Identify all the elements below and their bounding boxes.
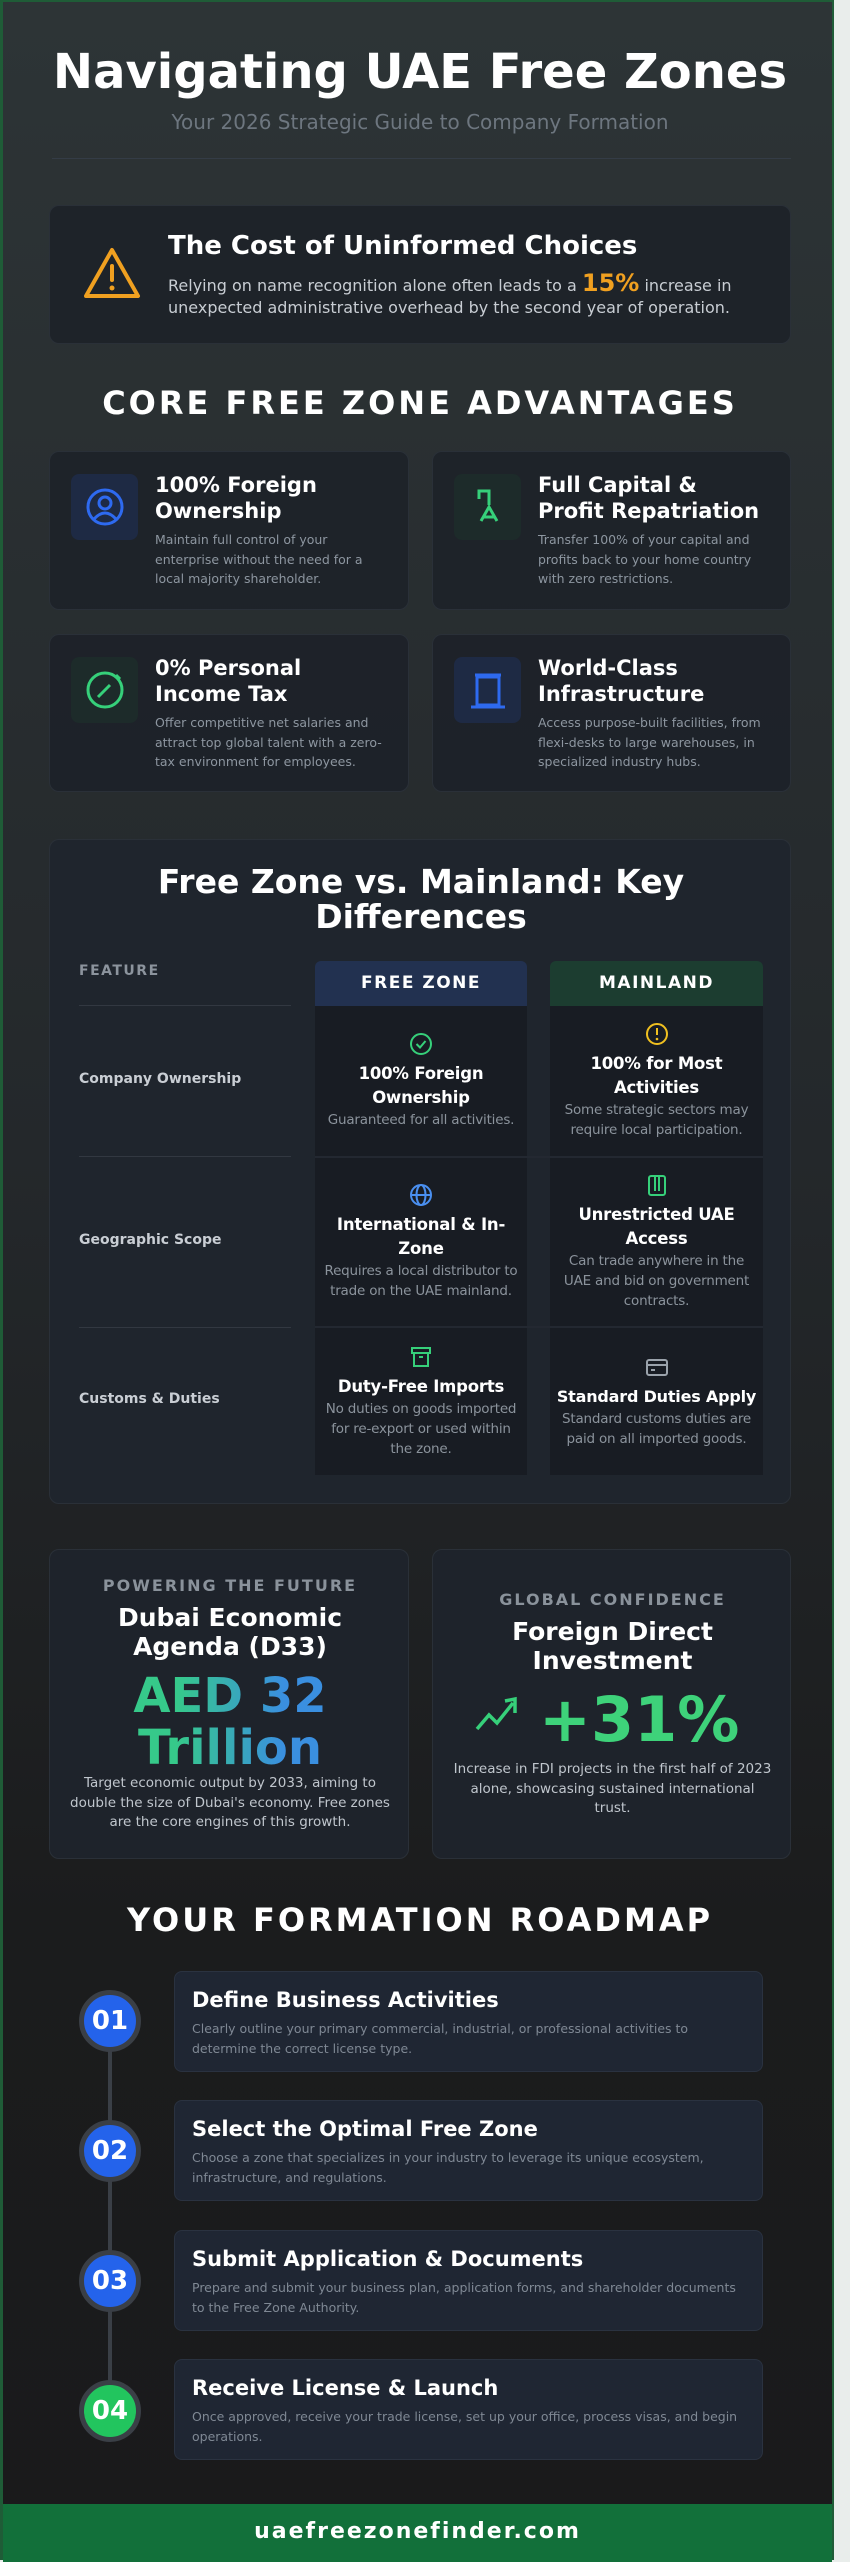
panel: comparison bbox=[49, 839, 791, 1504]
step 4: Receive License & Launch bbox=[192, 2376, 498, 2400]
column header: mainland bbox=[550, 961, 763, 1006]
card: foreign ownership: Ownership bbox=[155, 499, 281, 523]
marker 1 bbox=[79, 1990, 141, 2052]
row label: customs: Customs & Duties bbox=[79, 1391, 220, 1407]
cell: FZ geographic: International & In- bbox=[337, 1215, 505, 1234]
cell: FZ ownership bbox=[328, 1033, 514, 1128]
step 3: Submit Application & Documents bbox=[192, 2247, 583, 2271]
icon: building bbox=[454, 657, 521, 723]
cell: ML ownership: require local participation. bbox=[570, 1122, 743, 1138]
column header: feature: FEATURE bbox=[79, 963, 160, 979]
footer bbox=[3, 2504, 832, 2562]
icon: warning bbox=[84, 248, 140, 298]
cell: FZ ownership: Guaranteed for all activities. bbox=[328, 1112, 514, 1128]
card: infrastructure: World-Class bbox=[538, 656, 678, 680]
big number: Trillion bbox=[138, 1720, 322, 1776]
cell: FZ geographic: Zone bbox=[398, 1239, 444, 1258]
step 2: Select the Optimal Free Zone bbox=[192, 2117, 538, 2141]
stat card: D33: POWERING THE FUTURE bbox=[103, 1576, 357, 1595]
step 4 bbox=[174, 2359, 763, 2460]
row label: geographic: Geographic Scope bbox=[79, 1232, 221, 1248]
cell: ML geographic: Can trade anywhere in the bbox=[569, 1253, 744, 1269]
panel title: Free Zone vs. Mainland: Key bbox=[158, 862, 684, 901]
card: income tax: Income Tax bbox=[155, 682, 287, 706]
cell: ML customs: paid on all imported goods. bbox=[567, 1430, 746, 1446]
alert card: cost of uninformed choices bbox=[49, 205, 791, 344]
stat card: FDI bbox=[432, 1549, 791, 1859]
stat card: FDI: Foreign Direct bbox=[512, 1617, 713, 1646]
step 1: Define Business Activities bbox=[192, 1988, 499, 2012]
step 3: Prepare and submit your business plan, application forms, and shareholder documents to the Free Zone Authority. bbox=[192, 2280, 736, 2315]
marker 1: 01 bbox=[92, 2006, 128, 2036]
card: capital repatriation: Profit Repatriation bbox=[538, 499, 759, 523]
cell: FZ geographic bbox=[324, 1184, 517, 1299]
card: capital repatriation bbox=[432, 451, 791, 610]
icon: user bbox=[71, 474, 138, 540]
card: capital repatriation: Full Capital & bbox=[538, 473, 697, 497]
cell: FZ customs: the zone. bbox=[390, 1440, 452, 1456]
card: income tax: 0% Personal bbox=[155, 656, 301, 680]
stat card: FDI: GLOBAL CONFIDENCE bbox=[499, 1590, 726, 1609]
cell: ML geographic: Unrestricted UAE bbox=[578, 1205, 735, 1224]
step 2 bbox=[174, 2100, 763, 2201]
step 1 bbox=[174, 1971, 763, 2072]
column header: free zone bbox=[315, 961, 527, 1006]
cell: FZ customs: for re-export or used within bbox=[331, 1420, 511, 1436]
cell: ML ownership: Some strategic sectors may bbox=[565, 1102, 748, 1118]
big number: AED 32 bbox=[133, 1668, 327, 1724]
card: infrastructure: Infrastructure bbox=[538, 682, 704, 706]
marker 3: 03 bbox=[92, 2266, 128, 2296]
stat card: D33 bbox=[49, 1549, 409, 1859]
cell: ML ownership: 100% for Most bbox=[590, 1054, 722, 1073]
card: foreign ownership: Maintain full control of your enterprise without the need for a local majority shareholder. bbox=[155, 532, 363, 586]
icon: transfer bbox=[454, 474, 521, 540]
cell: ML geographic: Access bbox=[626, 1229, 687, 1248]
stat card: D33: Dubai Economic bbox=[118, 1603, 342, 1632]
card: infrastructure: Access purpose-built facilities, from flexi-desks to large warehouses, in specialized industry hubs. bbox=[538, 715, 761, 769]
cell: FZ customs: No duties on goods imported bbox=[326, 1400, 516, 1416]
row label: ownership: Company Ownership bbox=[79, 1071, 241, 1087]
stat card: FDI: Investment bbox=[533, 1646, 692, 1675]
stat card: D33: Target economic output by 2033, aiming to double the size of Dubai's economy. Free zones are the core engines of this growth. bbox=[70, 1775, 390, 1830]
icon: trend up bbox=[476, 1696, 517, 1730]
title: Navigating UAE Free Zones bbox=[53, 44, 787, 100]
cell: FZ customs: Duty-Free Imports bbox=[338, 1376, 504, 1396]
card: infrastructure bbox=[432, 634, 791, 792]
card: capital repatriation: Transfer 100% of your capital and profits back to your home country with zero restrictions. bbox=[538, 532, 751, 586]
text: Relying on name recognition alone often leads to a 15% increase in unexpected administrative overhead by the second year of operation. bbox=[168, 269, 732, 317]
card: income tax: Offer competitive net salaries and attract top global talent with a zero-tax environment for employees. bbox=[155, 715, 382, 769]
cell: ML customs bbox=[557, 1359, 756, 1446]
cell: ML geographic bbox=[564, 1175, 749, 1309]
cell: ML ownership: Activities bbox=[614, 1078, 699, 1097]
big number bbox=[50, 1670, 410, 1774]
heading: The Cost of Uninformed Choices bbox=[168, 231, 637, 261]
cell: ML geographic: UAE and bid on government bbox=[564, 1273, 749, 1289]
panel title bbox=[158, 862, 684, 936]
stat card: FDI: Increase in FDI projects in the first half of 2023 alone, showcasing sustained international trust. bbox=[454, 1761, 771, 1816]
step 1: Clearly outline your primary commercial, industrial, or professional activities to determine the correct license type. bbox=[192, 2021, 688, 2056]
marker 4 bbox=[79, 2380, 141, 2442]
marker 2 bbox=[79, 2120, 141, 2182]
heading: core advantages: CORE FREE ZONE ADVANTAGES bbox=[102, 384, 738, 422]
column header: free zone: FREE ZONE bbox=[361, 973, 481, 993]
cell: ML ownership bbox=[565, 1023, 748, 1138]
cell: FZ geographic: trade on the UAE mainland. bbox=[330, 1283, 512, 1299]
big number: +31% bbox=[539, 1683, 739, 1756]
card: income tax bbox=[49, 634, 409, 792]
step 2: Choose a zone that specializes in your industry to leverage its unique ecosystem, infrastructure, and regulations. bbox=[192, 2150, 704, 2185]
card: foreign ownership bbox=[49, 451, 409, 610]
panel title: Differences bbox=[315, 897, 527, 936]
footer: uaefreezonefinder.com bbox=[254, 2519, 581, 2544]
stat card: D33: Agenda (D33) bbox=[133, 1632, 327, 1661]
marker 2: 02 bbox=[92, 2136, 128, 2166]
cell: FZ geographic: Requires a local distributor to bbox=[324, 1263, 517, 1279]
marker 3 bbox=[79, 2250, 141, 2312]
subtitle: Your 2026 Strategic Guide to Company Formation bbox=[171, 110, 669, 134]
marker 4: 04 bbox=[92, 2396, 128, 2426]
cell: ML geographic: contracts. bbox=[624, 1293, 689, 1309]
icon: percent dial bbox=[71, 657, 138, 723]
step 4: Once approved, receive your trade license, set up your office, process visas, and begin operations. bbox=[192, 2409, 737, 2444]
column header: mainland: MAINLAND bbox=[599, 973, 714, 993]
card: foreign ownership: 100% Foreign bbox=[155, 473, 317, 497]
cell: FZ ownership: Ownership bbox=[372, 1088, 470, 1107]
cell: FZ ownership: 100% Foreign bbox=[359, 1064, 483, 1083]
cell: ML customs: Standard Duties Apply bbox=[557, 1386, 756, 1406]
step 3 bbox=[174, 2230, 763, 2331]
cell: FZ customs bbox=[326, 1347, 516, 1456]
heading: roadmap: YOUR FORMATION ROADMAP bbox=[127, 1901, 713, 1939]
cell: ML customs: Standard customs duties are bbox=[562, 1410, 751, 1426]
